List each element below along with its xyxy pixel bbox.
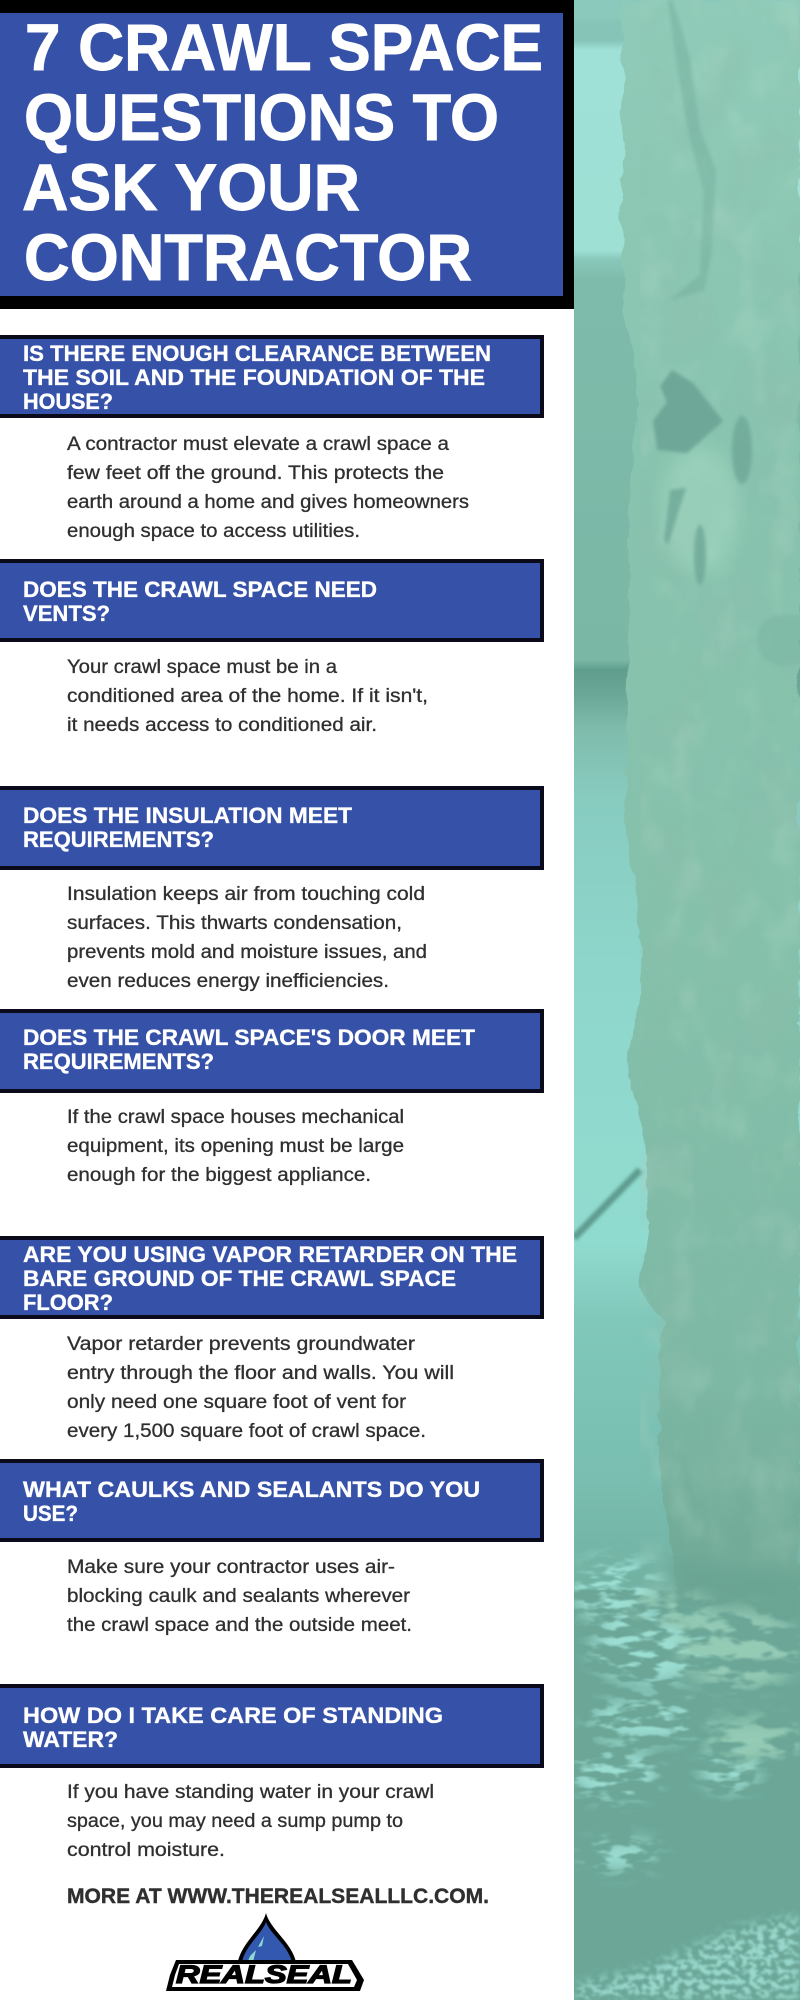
answer 6 [67,1557,412,1636]
answer 4: If the crawl space houses mechanical [67,1107,404,1128]
question 5 heading: FLOOR? [23,1290,113,1315]
website call to action: MORE AT WWW.THEREALSEALLLC.COM. [67,1884,489,1908]
question 7 heading [0,1684,544,1768]
question 2 heading [0,559,544,642]
answer 1: A contractor must elevate a crawl space a [67,434,449,455]
answer 3 [67,884,427,992]
strip of open space behind the wall [574,0,800,1590]
answer 5: Vapor retarder prevents groundwater [67,1334,416,1355]
hole in wall [653,370,723,453]
question 5 heading [0,1236,544,1319]
logo: RealSeal [166,1913,364,1991]
title block [0,0,574,309]
question 4 heading [0,1009,544,1093]
question 7 heading: WATER? [23,1727,118,1752]
title text: CONTRACTOR [24,220,472,294]
wet floor [574,1590,800,1630]
question 1 heading: IS THERE ENOUGH CLEARANCE BETWEEN [23,341,491,366]
question 2 heading: DOES THE CRAWL SPACE NEED [23,577,377,602]
icon: water drop [237,1913,297,1970]
gouges and cracks in wall [664,0,800,666]
foundation wall [622,0,800,1625]
title text [22,10,543,294]
question 5 heading: BARE GROUND OF THE CRAWL SPACE [23,1266,456,1291]
answer 3: prevents mold and moisture issues, and [67,942,427,963]
answer 1: few feet off the ground. This protects the [67,463,444,484]
question 1 heading: THE SOIL AND THE FOUNDATION OF THE [23,365,485,390]
answer 7: If you have standing water in your crawl [67,1782,434,1803]
question 2 heading: VENTS? [23,601,110,626]
answer 6: Make sure your contractor uses air- [67,1557,395,1578]
answer 7: space, you may need a sump pump to [67,1811,403,1832]
title text: ASK YOUR [22,150,360,224]
foreground light gravel [574,1915,800,2000]
logo banner [166,1960,364,1991]
answer 5: every 1,500 square foot of crawl space. [67,1421,426,1442]
title text: 7 CRAWL SPACE [25,10,543,84]
answer 3: Insulation keeps air from touching cold [67,884,425,905]
dark shadow at base of wall [672,1570,799,1590]
answer 4: equipment, its opening must be large [67,1136,404,1157]
pipe [574,1170,640,1238]
answer 5: only need one square foot of vent for [67,1392,407,1413]
answer 2 [67,657,428,736]
question 1 heading [0,335,544,418]
question 7 heading: HOW DO I TAKE CARE OF STANDING [23,1703,443,1728]
answer 1: enough space to access utilities. [67,521,360,542]
answer 7: control moisture. [67,1840,225,1861]
question 3 heading: DOES THE INSULATION MEET [23,803,352,828]
question 6 heading: USE? [23,1501,78,1526]
answer 3: even reduces energy inefficiencies. [67,971,389,992]
answer 3: surfaces. This thwarts condensation, [67,913,402,934]
question 6 heading: WHAT CAULKS AND SEALANTS DO YOU [23,1477,480,1502]
answer 1: earth around a home and gives homeowners [67,492,469,513]
wall shading and texture [640,0,800,1600]
question 5 heading: ARE YOU USING VAPOR RETARDER ON THE [23,1242,517,1267]
floor puddles [570,1556,760,1871]
title text: QUESTIONS TO [24,80,499,154]
answer 6: blocking caulk and sealants wherever [67,1586,411,1607]
answer 1 [67,434,469,542]
question 3 heading: REQUIREMENTS? [23,827,214,852]
answer 4: enough for the biggest appliance. [67,1165,371,1186]
answer 7 [67,1782,434,1861]
answer 2: Your crawl space must be in a [67,657,337,678]
answer 2: it needs access to conditioned air. [67,715,377,736]
answer 2: conditioned area of the home. If it isn't, [67,686,428,707]
question 4 heading: REQUIREMENTS? [23,1049,214,1074]
question 4 heading: DOES THE CRAWL SPACE'S DOOR MEET [23,1025,475,1050]
floor debris [630,1592,800,1762]
background photo: crawl space wall [570,0,800,2000]
answer 5 [67,1334,454,1442]
logo wordmark: REALSEAL [176,1961,352,1989]
answer 4 [67,1107,404,1186]
lighter wall patch [660,445,740,575]
answer 6: the crawl space and the outside meet. [67,1615,412,1636]
question 1 heading: HOUSE? [23,389,113,414]
question 6 heading [0,1459,544,1542]
question 3 heading [0,786,544,870]
answer 5: entry through the floor and walls. You will [67,1363,454,1384]
